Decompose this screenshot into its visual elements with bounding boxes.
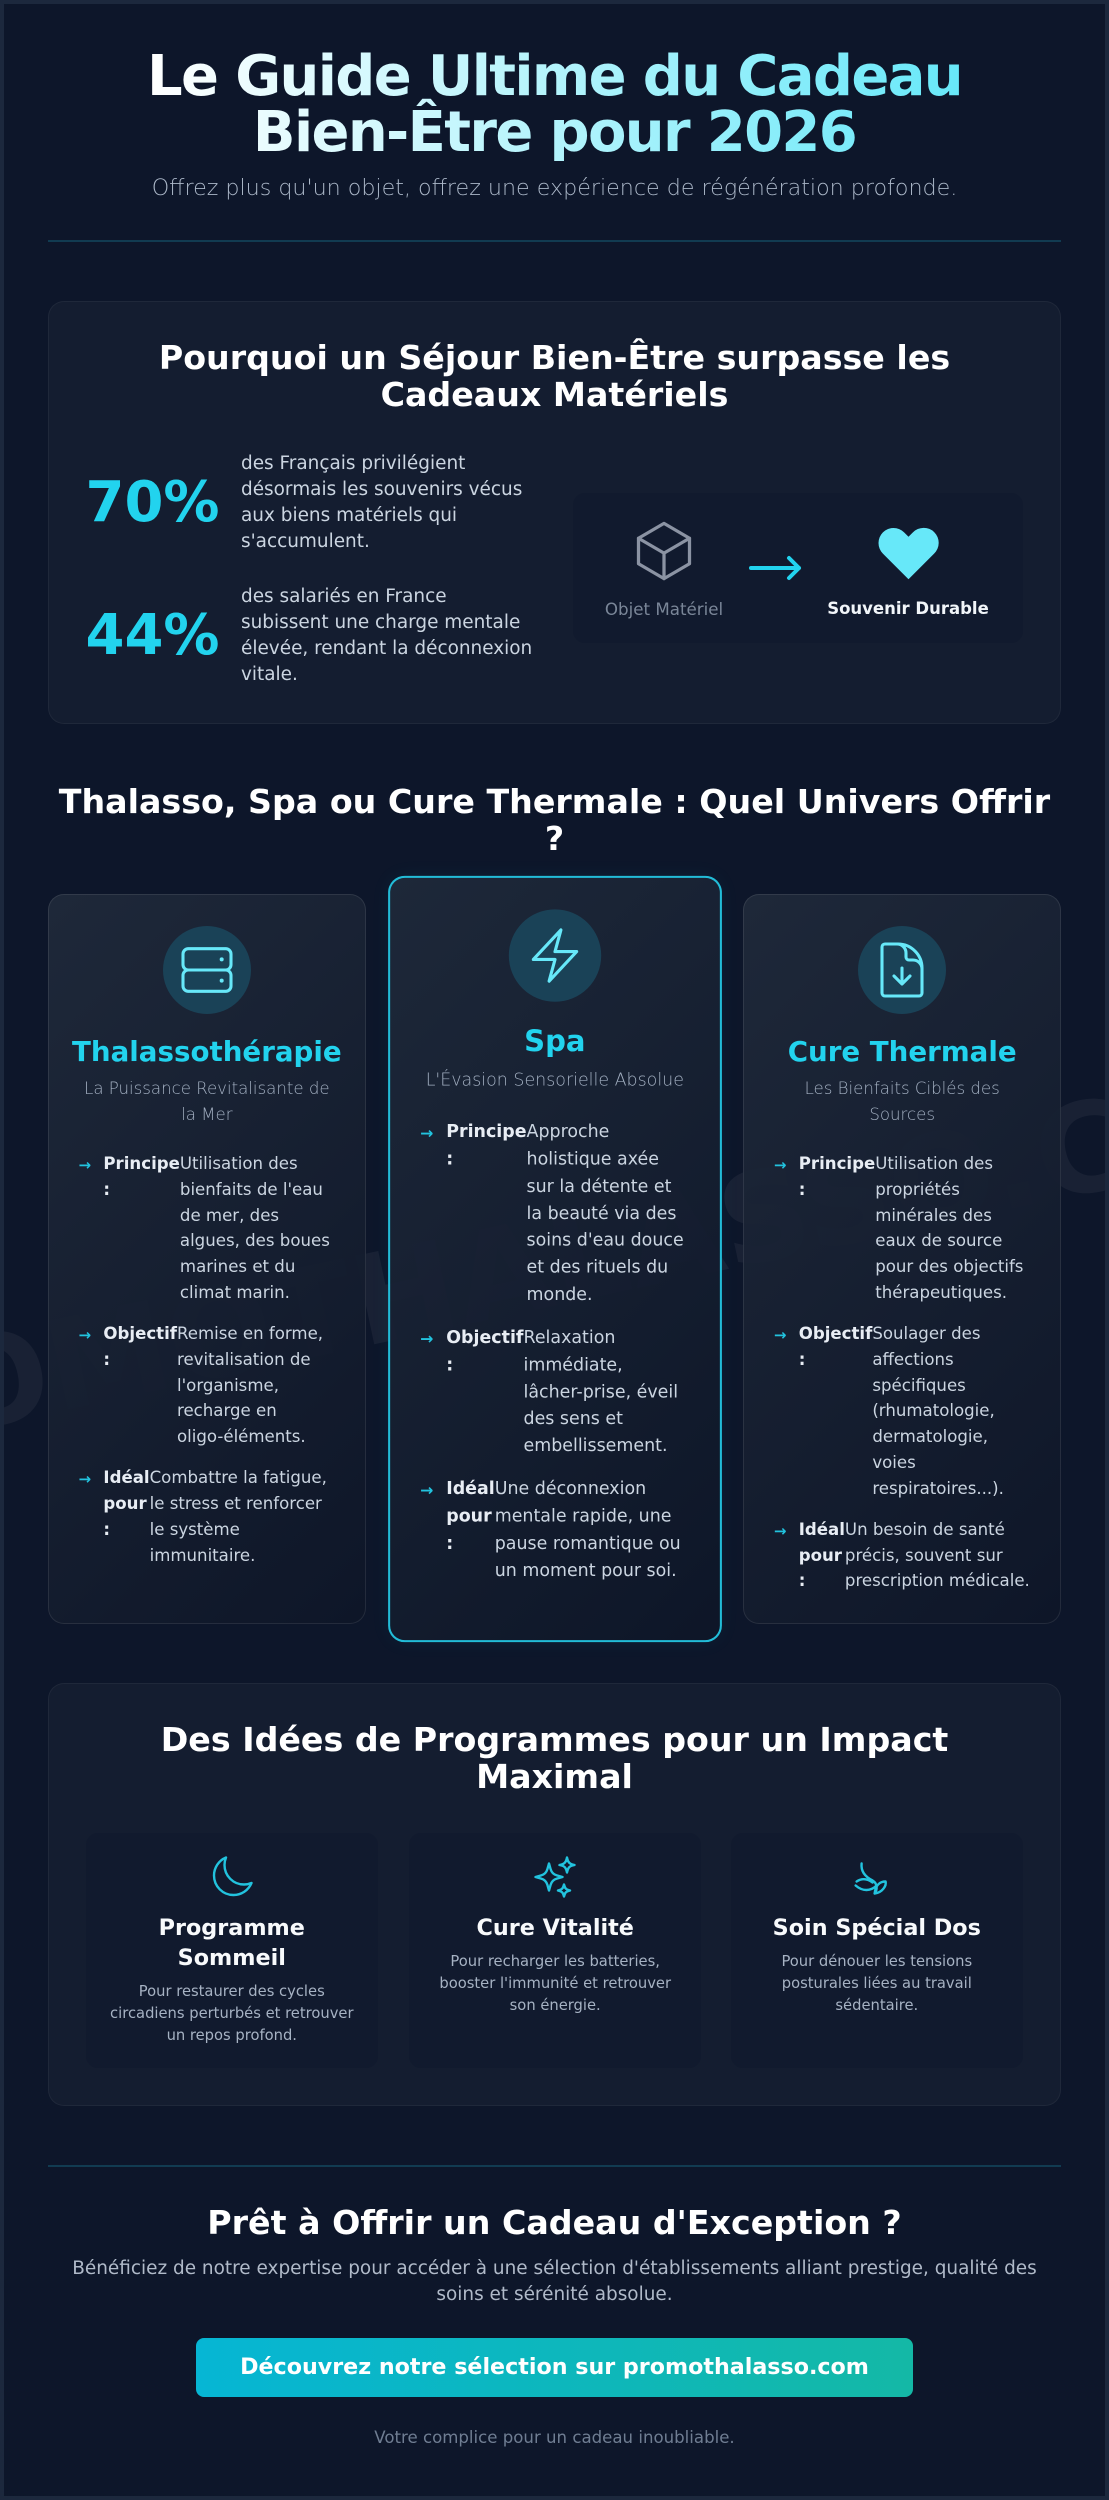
card list: Principe [446, 1122, 526, 1142]
card list [774, 1154, 1030, 1590]
card list: un moment pour soi. [494, 1560, 676, 1580]
heading: why: Cadeaux Matériels [381, 374, 728, 414]
card list: : [446, 1533, 453, 1553]
card list: voies [872, 1453, 916, 1472]
card list: Idéal [103, 1468, 150, 1487]
card list: dermatologie, [872, 1427, 988, 1446]
stat text: 70% [241, 453, 522, 552]
card list: pour [446, 1506, 491, 1526]
panel: why a wellness stay [48, 301, 1061, 724]
text: call to action: soins et sérénité absolue. [436, 2284, 673, 2305]
panel: thalassotherapy card [48, 894, 366, 1624]
card list: Une déconnexion [494, 1479, 646, 1499]
text: call to action: Bénéficiez de notre expertise pour accéder à une sélection d'établissements alliant prestige, qualité des [72, 2258, 1037, 2279]
card list: → [774, 1326, 786, 1344]
card list: minérales des [875, 1206, 992, 1225]
card list: l'organisme, [177, 1376, 279, 1395]
card list: Utilisation des [180, 1154, 298, 1173]
card list: → [78, 1470, 91, 1488]
card subtitle: La Puissance Revitalisante de [84, 1079, 330, 1098]
card subtitle: la Mer [181, 1105, 233, 1124]
panel: thermal cure card [743, 894, 1061, 1624]
card list: : [446, 1149, 453, 1169]
programme: back care [731, 1832, 1023, 2068]
card title: Thalassothérapie [72, 1035, 342, 1068]
card subtitle: Sources [869, 1105, 935, 1124]
stat text: 44%: vitale. [241, 664, 298, 685]
card list: oligo-éléments. [177, 1427, 306, 1446]
card list: eaux de source [875, 1231, 1002, 1250]
card list: → [420, 1124, 433, 1143]
card list: spécifiques [872, 1376, 966, 1395]
programme text [110, 1982, 354, 2044]
card list: Combattre la fatigue, [150, 1468, 327, 1487]
card list: Idéal [799, 1520, 845, 1539]
card list: bienfaits de l'eau [180, 1180, 323, 1199]
programme title: Sommeil [178, 1945, 286, 1971]
card list: pour des objectifs [875, 1257, 1023, 1276]
card list: : [446, 1354, 453, 1374]
icon: server [163, 926, 251, 1014]
heading: programmes: Maximal [476, 1756, 633, 1796]
subtitle: Offrez plus qu'un objet, offrez une expérience de régénération profonde. [152, 175, 957, 201]
programme text: circadiens perturbés et retrouver [110, 2004, 354, 2022]
programme text: un repos profond. [167, 2026, 297, 2044]
programme text: sédentaire. [835, 1997, 918, 2014]
card list: Objectif [446, 1327, 523, 1347]
card list: : [799, 1350, 805, 1369]
stat text: 70%: désormais les souvenirs vécus [241, 479, 522, 500]
card list: → [78, 1156, 91, 1174]
programme text [439, 1953, 672, 2014]
card list: climat marin. [180, 1283, 290, 1302]
programme: sleep [86, 1832, 378, 2068]
panel: object to memory visual [573, 493, 1023, 643]
programme title [159, 1915, 305, 1971]
card list: : [799, 1571, 805, 1590]
stat text: 70%: s'accumulent. [241, 531, 370, 552]
icon: plant [854, 1862, 887, 1895]
card list: lâcher-prise, éveil [523, 1381, 678, 1401]
card list: : [103, 1350, 110, 1369]
card list: Un besoin de santé [845, 1520, 1005, 1539]
programme text: Pour restaurer des cycles [139, 1982, 325, 2000]
icon: heart [878, 528, 939, 580]
programme text: booster l'immunité et retrouver [439, 1975, 671, 1992]
stat text: 70%: des Français privilégient [241, 453, 465, 474]
programme title: Cure Vitalité [476, 1915, 634, 1941]
card list: monde. [526, 1284, 592, 1304]
card list: : [103, 1520, 110, 1539]
card list: Relaxation [523, 1327, 615, 1347]
arrow [749, 556, 802, 580]
heading: which universe: ? [545, 819, 564, 858]
button: Découvrez notre sélection sur promothalasso.com [240, 2354, 869, 2380]
card list: : [103, 1180, 110, 1199]
card list: sur la détente et [526, 1176, 671, 1196]
icon: sparkles [534, 1856, 576, 1898]
card list: le stress et renforcer [150, 1494, 322, 1513]
card list: mentale rapide, une [494, 1506, 671, 1526]
stat: 44%: 44% [86, 603, 220, 668]
stat text: 44% [241, 586, 532, 685]
card list: et des rituels du [526, 1257, 668, 1277]
programme text: Pour recharger les batteries, [450, 1953, 660, 1970]
stat text: 70%: aux biens matériels qui [241, 505, 457, 526]
card title: Cure Thermale [788, 1035, 1017, 1068]
card subtitle [84, 1079, 330, 1124]
stat text: 44%: des salariés en France [241, 586, 447, 607]
card list: pour [103, 1494, 147, 1513]
button [196, 2338, 913, 2396]
card list: → [78, 1326, 91, 1344]
card list: (rhumatologie, [872, 1401, 995, 1420]
title [147, 44, 962, 164]
card list: Principe [799, 1154, 875, 1173]
card list: Principe [103, 1154, 180, 1173]
card list: → [420, 1481, 433, 1500]
card list: précis, souvent sur [845, 1546, 1003, 1565]
programme text: son énergie. [510, 1997, 601, 2014]
card list: thérapeutiques. [875, 1283, 1007, 1302]
card list: Objectif [103, 1324, 177, 1343]
card list: Soulager des [872, 1324, 981, 1343]
panel: programme ideas [48, 1683, 1061, 2106]
card list: Remise en forme, [177, 1324, 323, 1343]
card list: soins d'eau douce [526, 1230, 683, 1250]
card list: revitalisation de [177, 1350, 311, 1369]
programme: vitality [409, 1832, 701, 2068]
card list: : [799, 1180, 805, 1199]
card list: holistique axée [526, 1149, 659, 1169]
programme text: posturales liées au travail [782, 1975, 972, 1992]
label: memory: Souvenir Durable [827, 599, 989, 618]
icon: moon [212, 1856, 253, 1896]
card list: respiratoires...). [872, 1479, 1004, 1498]
card list: algues, des boues [180, 1231, 330, 1250]
icon: cube [636, 522, 692, 580]
card list [420, 1122, 683, 1580]
heading: which universe [58, 782, 1050, 858]
card list: propriétés [875, 1180, 960, 1199]
card subtitle [805, 1079, 1000, 1124]
card list: immédiate, [523, 1354, 622, 1374]
card list [78, 1154, 330, 1565]
icon: document [858, 926, 946, 1014]
programme text: Pour dénouer les tensions [781, 1953, 972, 1970]
stat text: 44%: élevée, rendant la déconnexion [241, 638, 532, 659]
card list: → [774, 1522, 786, 1540]
card list: pause romantique ou [494, 1533, 680, 1553]
icon: bolt [508, 909, 601, 1002]
title: Le Guide Ultime du Cadeau [147, 44, 962, 108]
card list: immunitaire. [150, 1546, 255, 1565]
heading: why: Pourquoi un Séjour Bien-Être surpasse les [159, 338, 950, 376]
programme title: Programme [159, 1915, 305, 1941]
card list: embellissement. [523, 1436, 667, 1455]
stat text: 44%: subissent une charge mentale [241, 612, 520, 633]
card list: le système [150, 1520, 240, 1539]
card list: marines et du [180, 1257, 295, 1276]
card subtitle: Les Bienfaits Ciblés des [805, 1079, 1000, 1098]
card list: Approche [526, 1122, 609, 1142]
heading: call to action: Prêt à Offrir un Cadeau d'Exception ? [207, 2203, 902, 2242]
card list: Objectif [799, 1324, 872, 1343]
panel: spa card [388, 876, 721, 1642]
programme text [781, 1953, 972, 2014]
card title: Spa [524, 1023, 585, 1058]
card list: la beauté via des [526, 1203, 676, 1223]
heading: programmes [161, 1720, 948, 1796]
title: Bien-Être pour 2026 [253, 100, 856, 164]
card list: Utilisation des [875, 1154, 993, 1173]
card list: de mer, des [180, 1206, 279, 1225]
card list: → [774, 1156, 786, 1174]
card list: prescription médicale. [845, 1571, 1030, 1590]
card list: Idéal [446, 1479, 494, 1499]
card list: des sens et [523, 1408, 623, 1428]
card subtitle: L'Évasion Sensorielle Absolue [425, 1070, 684, 1090]
label: object: Objet Matériel [605, 599, 723, 619]
heading: why [159, 338, 950, 414]
heading: which universe: Thalasso, Spa ou Cure Thermale : Quel Univers Offrir [59, 782, 1050, 821]
card list: pour [799, 1546, 842, 1565]
card list: → [420, 1329, 433, 1348]
card list: affections [872, 1350, 954, 1369]
footer: Votre complice pour un cadeau inoubliable. [374, 2428, 735, 2447]
card list: recharge en [177, 1401, 277, 1420]
stat: 70%: 70% [86, 470, 220, 535]
programme title: Soin Spécial Dos [773, 1915, 981, 1941]
heading: programmes: Des Idées de Programmes pour un Impact [161, 1720, 948, 1758]
text: call to action [72, 2258, 1037, 2305]
